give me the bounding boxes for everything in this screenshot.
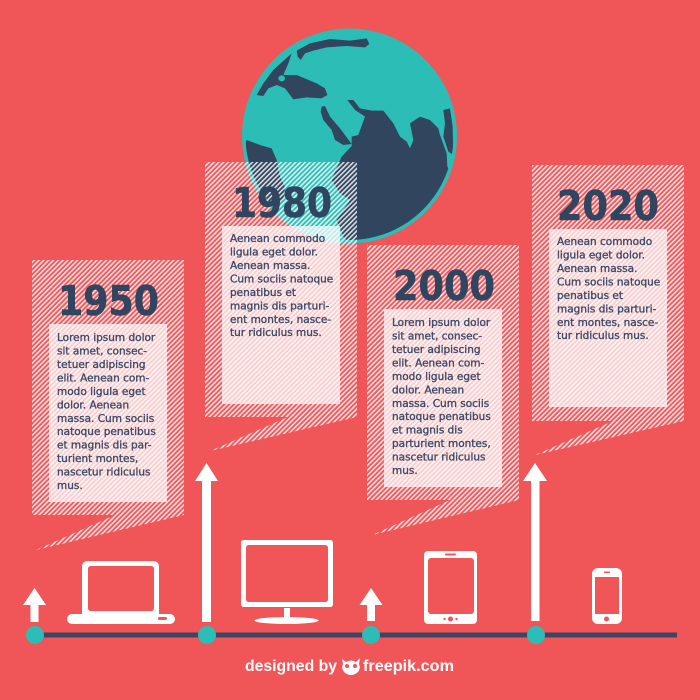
text: 1950 body: elit. Aenean com- <box>57 372 150 384</box>
text: 1950 body: modo ligula eget <box>57 386 146 398</box>
icon: smartphone <box>592 568 622 624</box>
panel: 1980 <box>205 162 357 451</box>
text: 2020 body: tur ridiculus mus. <box>557 330 649 342</box>
text: 2020 body: ent montes, nasce- <box>557 317 658 329</box>
text: 1950 body: et magnis dis par- <box>57 440 152 452</box>
icon: tablet <box>424 551 477 624</box>
text: 2000 body: et magnis dis <box>392 425 463 437</box>
text: 2000 body: tetuer adipiscing <box>392 344 481 356</box>
footer credit: designed by <box>245 658 337 675</box>
text: 2020 body: Aenean massa. <box>557 263 637 275</box>
text: 2000 body: massa. Cum sociis <box>392 398 489 410</box>
text: 2000 body: nascetur ridiculus <box>392 452 486 464</box>
globe <box>237 28 460 250</box>
text: 1980 body: magnis dis parturi- <box>230 300 330 312</box>
text: 1980 body: Aenean massa. <box>230 260 310 272</box>
year: 2000: 2000 <box>393 262 495 310</box>
text: 1950 body: sit amet, consec- <box>57 346 147 358</box>
text: 2000 body: mus. <box>392 465 418 477</box>
text: 1950 body: Lorem ipsum dolor <box>57 332 156 344</box>
text: 2000 body: modo ligula eget <box>392 371 481 383</box>
panel: 2020 <box>532 165 684 455</box>
text: 2020 body: penatibus et <box>557 290 623 302</box>
year: 1980: 1980 <box>232 179 332 227</box>
text: 2020 body: Cum sociis natoque <box>557 276 660 288</box>
text: 1950 body: massa. Cum sociis <box>57 413 154 425</box>
footer credit: freepik.com <box>363 658 454 675</box>
text: 2000 body: parturient montes, <box>392 438 491 450</box>
text: 1950 body: dolor. Aenean <box>57 399 129 411</box>
text: 1980 body: tur ridiculus mus. <box>230 327 322 339</box>
timeline <box>26 626 677 644</box>
panel: 1950 <box>32 260 184 550</box>
arrow: 1980 <box>195 463 218 622</box>
text: 1950 body: nascetur ridiculus <box>57 467 151 479</box>
arrow: 2000 <box>360 588 382 621</box>
text: 1950 body: tetuer adipiscing <box>57 359 146 371</box>
year: 2020: 2020 <box>557 182 659 230</box>
icon: desktop monitor <box>241 540 333 624</box>
text: 1950 body: natoque penatibus <box>57 426 156 438</box>
text: 2020 body: ligula eget dolor. <box>557 250 645 262</box>
text: 2020 body: Aenean commodo <box>557 236 652 248</box>
text: 1950 body: mus. <box>57 480 83 492</box>
text: 2000 body: Lorem ipsum dolor <box>392 317 491 329</box>
footer credit <box>245 658 454 675</box>
year: 1950: 1950 <box>58 277 159 325</box>
text: 2020 body: magnis dis parturi- <box>557 303 657 315</box>
icon: laptop <box>67 561 175 624</box>
text: 2000 body: sit amet, consec- <box>392 330 482 342</box>
text: 2000 body: natoque penatibus <box>392 411 491 423</box>
text: 1980 body: ligula eget dolor. <box>230 246 318 258</box>
arrow: 2020 <box>523 463 547 621</box>
panel: 2000 <box>367 245 519 535</box>
text: 1980 body: Cum sociis natoque <box>230 273 333 285</box>
text: 1980 body: ent montes, nasce- <box>230 314 331 326</box>
text: 2000 body: elit. Aenean com- <box>392 357 485 369</box>
text: 1980 body: Aenean commodo <box>230 233 325 245</box>
text: 2000 body: dolor. Aenean <box>392 384 464 396</box>
text: 1980 body: penatibus et <box>230 287 296 299</box>
arrow: 1950 <box>23 588 46 622</box>
text: 1950 body: turient montes, <box>57 453 138 465</box>
